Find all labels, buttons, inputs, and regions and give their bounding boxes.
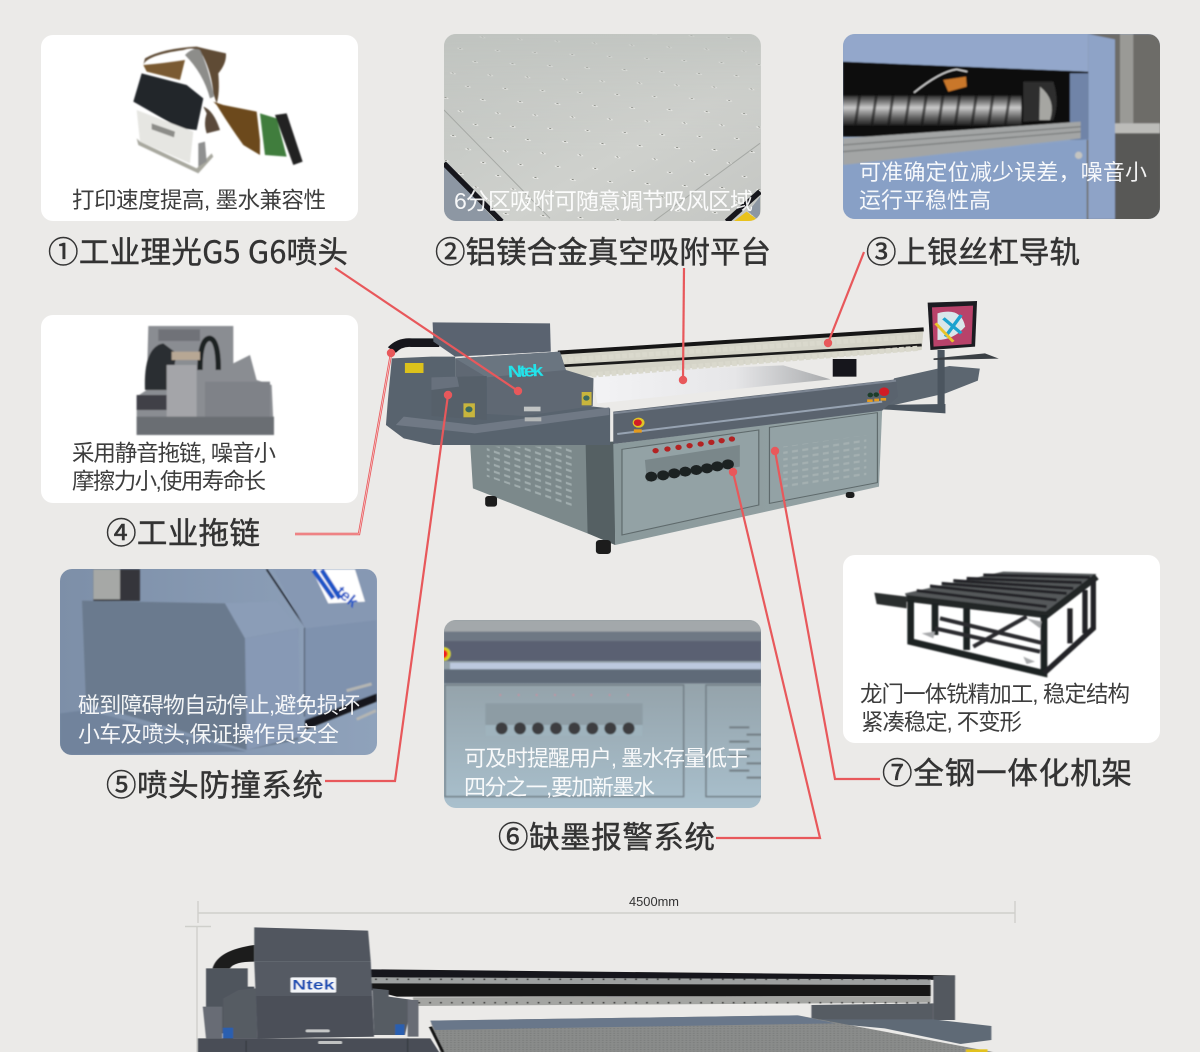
platform top <box>396 407 609 433</box>
callout line: anti-collision <box>325 391 452 781</box>
panel: drag chain card <box>41 315 358 503</box>
callout line: steel frame <box>771 447 880 779</box>
side cabinet <box>470 442 615 545</box>
icon: carriage close-up photo <box>60 569 377 755</box>
printer logo: Ntek <box>507 360 545 381</box>
callout line: ball screw <box>824 252 864 347</box>
heading: ink alarm: ⑥缺墨报警系统 <box>498 813 715 857</box>
dimension line: 4500mm <box>185 894 1015 1052</box>
machine base <box>198 1038 439 1052</box>
callout line: printhead <box>335 268 522 395</box>
icon: ink cabinet close-up photo <box>437 620 763 797</box>
text: steel frame description line one: 龙门一体铣精加工, 稳定结构 <box>860 682 1130 707</box>
right side wing and stand <box>882 350 999 413</box>
icon: steel frame photo <box>874 572 1097 673</box>
front top rail <box>613 379 898 444</box>
panel: steel frame card <box>843 555 1160 743</box>
printer left platform <box>386 357 610 445</box>
text: drag chain description line one: 采用静音拖链, 噪音小 <box>72 441 276 466</box>
text: steel frame description line two: 紧凑稳定, 不变形 <box>861 710 1022 735</box>
text: ink alarm description line two: 四分之一,要加新墨水 <box>464 775 655 800</box>
icon: drag chain photo <box>137 326 274 435</box>
cable chain <box>392 343 439 350</box>
icon: ball screw photo <box>843 34 1162 221</box>
text: ball screw description line two: 运行平稳性高 <box>859 188 991 213</box>
caster wheels <box>485 492 854 554</box>
left frame <box>206 968 254 1033</box>
white print table <box>592 365 831 403</box>
icon: perforated aluminium plate <box>444 34 761 222</box>
text: ink alarm description line one: 可及时提醒用户, 墨水存量低于 <box>464 746 748 771</box>
illustration: UV flatbed printer <box>386 301 999 554</box>
panel: ball screw card <box>843 34 1162 221</box>
text: anti-collision description line one: 碰到障碍物自动停止,避免损坏 <box>78 693 360 718</box>
front cabinet with doors <box>613 410 882 545</box>
gantry beam <box>558 327 924 378</box>
panel: printhead card <box>41 35 358 221</box>
print carriage <box>431 322 594 421</box>
dimension label: 4500mm <box>629 894 679 909</box>
heading: vacuum table: ②铝镁合金真空吸附平台 <box>435 228 771 272</box>
printer logo badge: Ntek <box>292 978 335 993</box>
text: vacuum table description: 6分区吸附可随意调节吸风区域 <box>454 188 753 214</box>
cable chain arc <box>213 945 254 968</box>
panel: anti-collision card <box>60 569 377 755</box>
heading: drag chain: ④工业拖链 <box>106 509 260 553</box>
perforated table <box>430 1015 993 1052</box>
icon: printhead photo <box>133 47 303 173</box>
warning label <box>405 363 423 373</box>
print carriage <box>203 927 418 1039</box>
text: printhead description: 打印速度提高, 墨水兼容性 <box>72 188 326 213</box>
heading: ball screw: ③上银丝杠导轨 <box>866 228 1080 272</box>
heading: anti-collision: ⑤喷头防撞系统 <box>106 761 323 805</box>
monitor with print artwork <box>928 301 977 350</box>
panel: ink alarm card <box>437 620 763 808</box>
text: ball screw description line one: 可准确定位减少误差，噪音小 <box>859 160 1147 185</box>
right gantry post <box>811 975 991 1044</box>
illustration: printer front view <box>198 927 993 1052</box>
panel: vacuum table card <box>444 34 761 222</box>
callout line: drag chain <box>295 349 395 534</box>
heading: steel frame: ⑦全钢一体化机架 <box>882 749 1132 793</box>
text: anti-collision description line two: 小车及喷头,保证操作员安全 <box>78 722 339 747</box>
icon: carriage close-up photo: tek <box>332 583 361 611</box>
callout line: vacuum table <box>679 268 687 384</box>
gantry beam <box>371 969 955 1006</box>
ink window <box>645 436 740 482</box>
heading: printhead: ①工业理光G5 G6喷头 <box>48 228 348 272</box>
text: drag chain description line two: 摩擦力小,使用寿命长 <box>72 469 266 494</box>
callout line: ink alarm <box>716 468 820 838</box>
